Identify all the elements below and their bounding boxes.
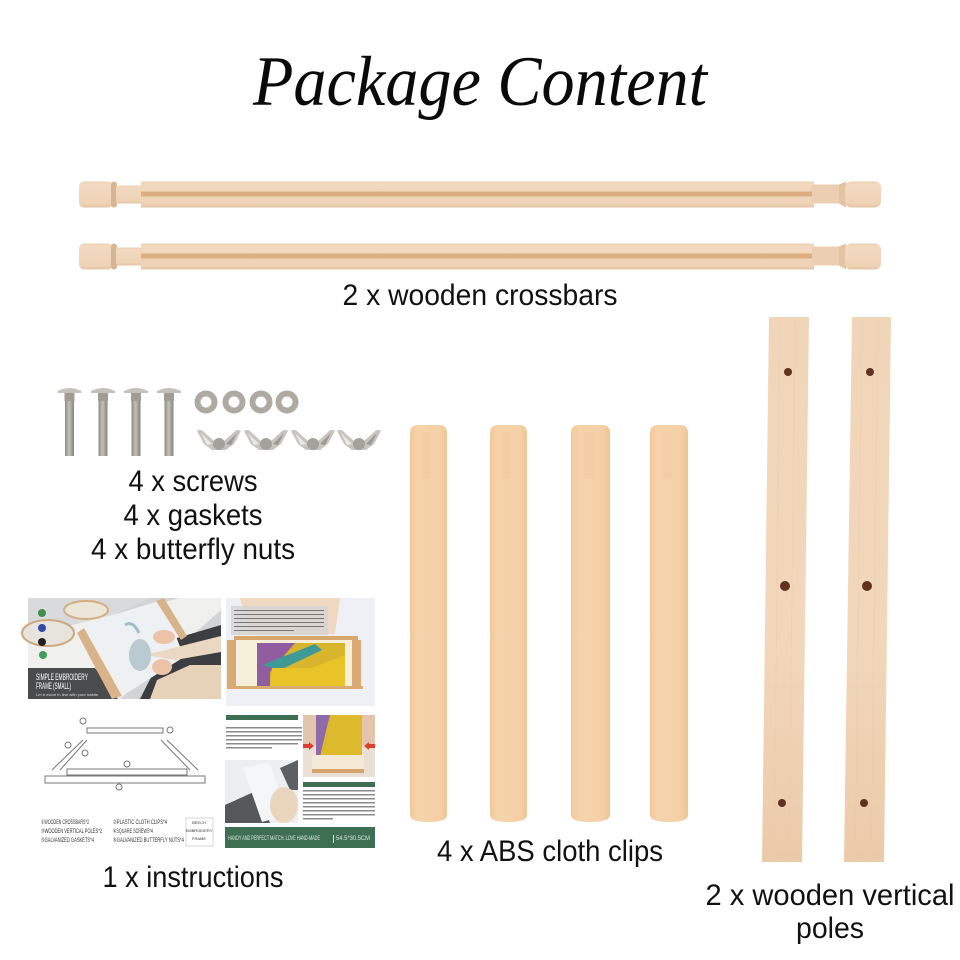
diagram parts list: ③WOODEN VERTICAL POLES*2 bbox=[41, 828, 102, 835]
label: hardware: 4 x gaskets bbox=[124, 499, 262, 532]
photo: woman using frame: Let it move in line with your habits bbox=[36, 692, 98, 697]
label: instructions: 1 x instructions bbox=[102, 861, 284, 894]
gaskets bbox=[198, 394, 296, 410]
photo: woman using frame: SIMPLE EMBROIDERY bbox=[36, 672, 88, 682]
label: clips: 4 x ABS cloth clips bbox=[437, 835, 663, 868]
diagram box label: FRAME bbox=[192, 836, 206, 841]
info page: 54.5*30.5CM bbox=[336, 836, 370, 842]
butterfly nuts bbox=[197, 430, 381, 450]
ABS cloth clips bbox=[410, 425, 688, 822]
diagram parts list: ⑤GALVANIZED GASKETS*4 bbox=[41, 837, 94, 844]
photo: woman using frame bbox=[22, 598, 221, 699]
info page: HANDY AND PERFECT MATCH. LOVE HAND-MADE bbox=[228, 836, 320, 842]
wooden crossbars bbox=[79, 182, 881, 270]
wooden vertical poles bbox=[762, 317, 891, 862]
info page bbox=[225, 715, 375, 848]
label: poles: poles bbox=[796, 912, 864, 945]
diagram parts list bbox=[41, 819, 184, 844]
diagram box label: BEECH bbox=[192, 820, 206, 825]
label: poles: 2 x wooden vertical bbox=[706, 879, 954, 912]
label: hardware: 4 x butterfly nuts bbox=[91, 533, 295, 566]
photo: woman using frame: FRAME (SMALL) bbox=[36, 681, 71, 691]
label: crossbars: 2 x wooden crossbars bbox=[342, 279, 618, 312]
label: hardware: 4 x screws bbox=[128, 465, 258, 498]
photo: frame with colourful cloth bbox=[226, 598, 375, 706]
label: hardware bbox=[91, 465, 295, 566]
title: Package Content bbox=[252, 43, 709, 121]
diagram box label: EMBROIDERY bbox=[186, 828, 213, 833]
label: poles bbox=[706, 879, 954, 945]
instructions sheet bbox=[22, 598, 375, 848]
diagram parts list: ④SQUARE SCREWS*4 bbox=[113, 828, 153, 835]
diagram parts list: ②PLASTIC CLOTH CLIPS*4 bbox=[113, 819, 167, 826]
diagram parts list: ①WOODEN CROSSBARS*2 bbox=[41, 819, 89, 826]
screws bbox=[58, 388, 181, 456]
diagram parts list: ⑥GALVANIZED BUTTERFLY NUTS*4 bbox=[113, 837, 184, 844]
assembly diagram bbox=[45, 718, 205, 790]
diagram box label bbox=[186, 818, 213, 846]
